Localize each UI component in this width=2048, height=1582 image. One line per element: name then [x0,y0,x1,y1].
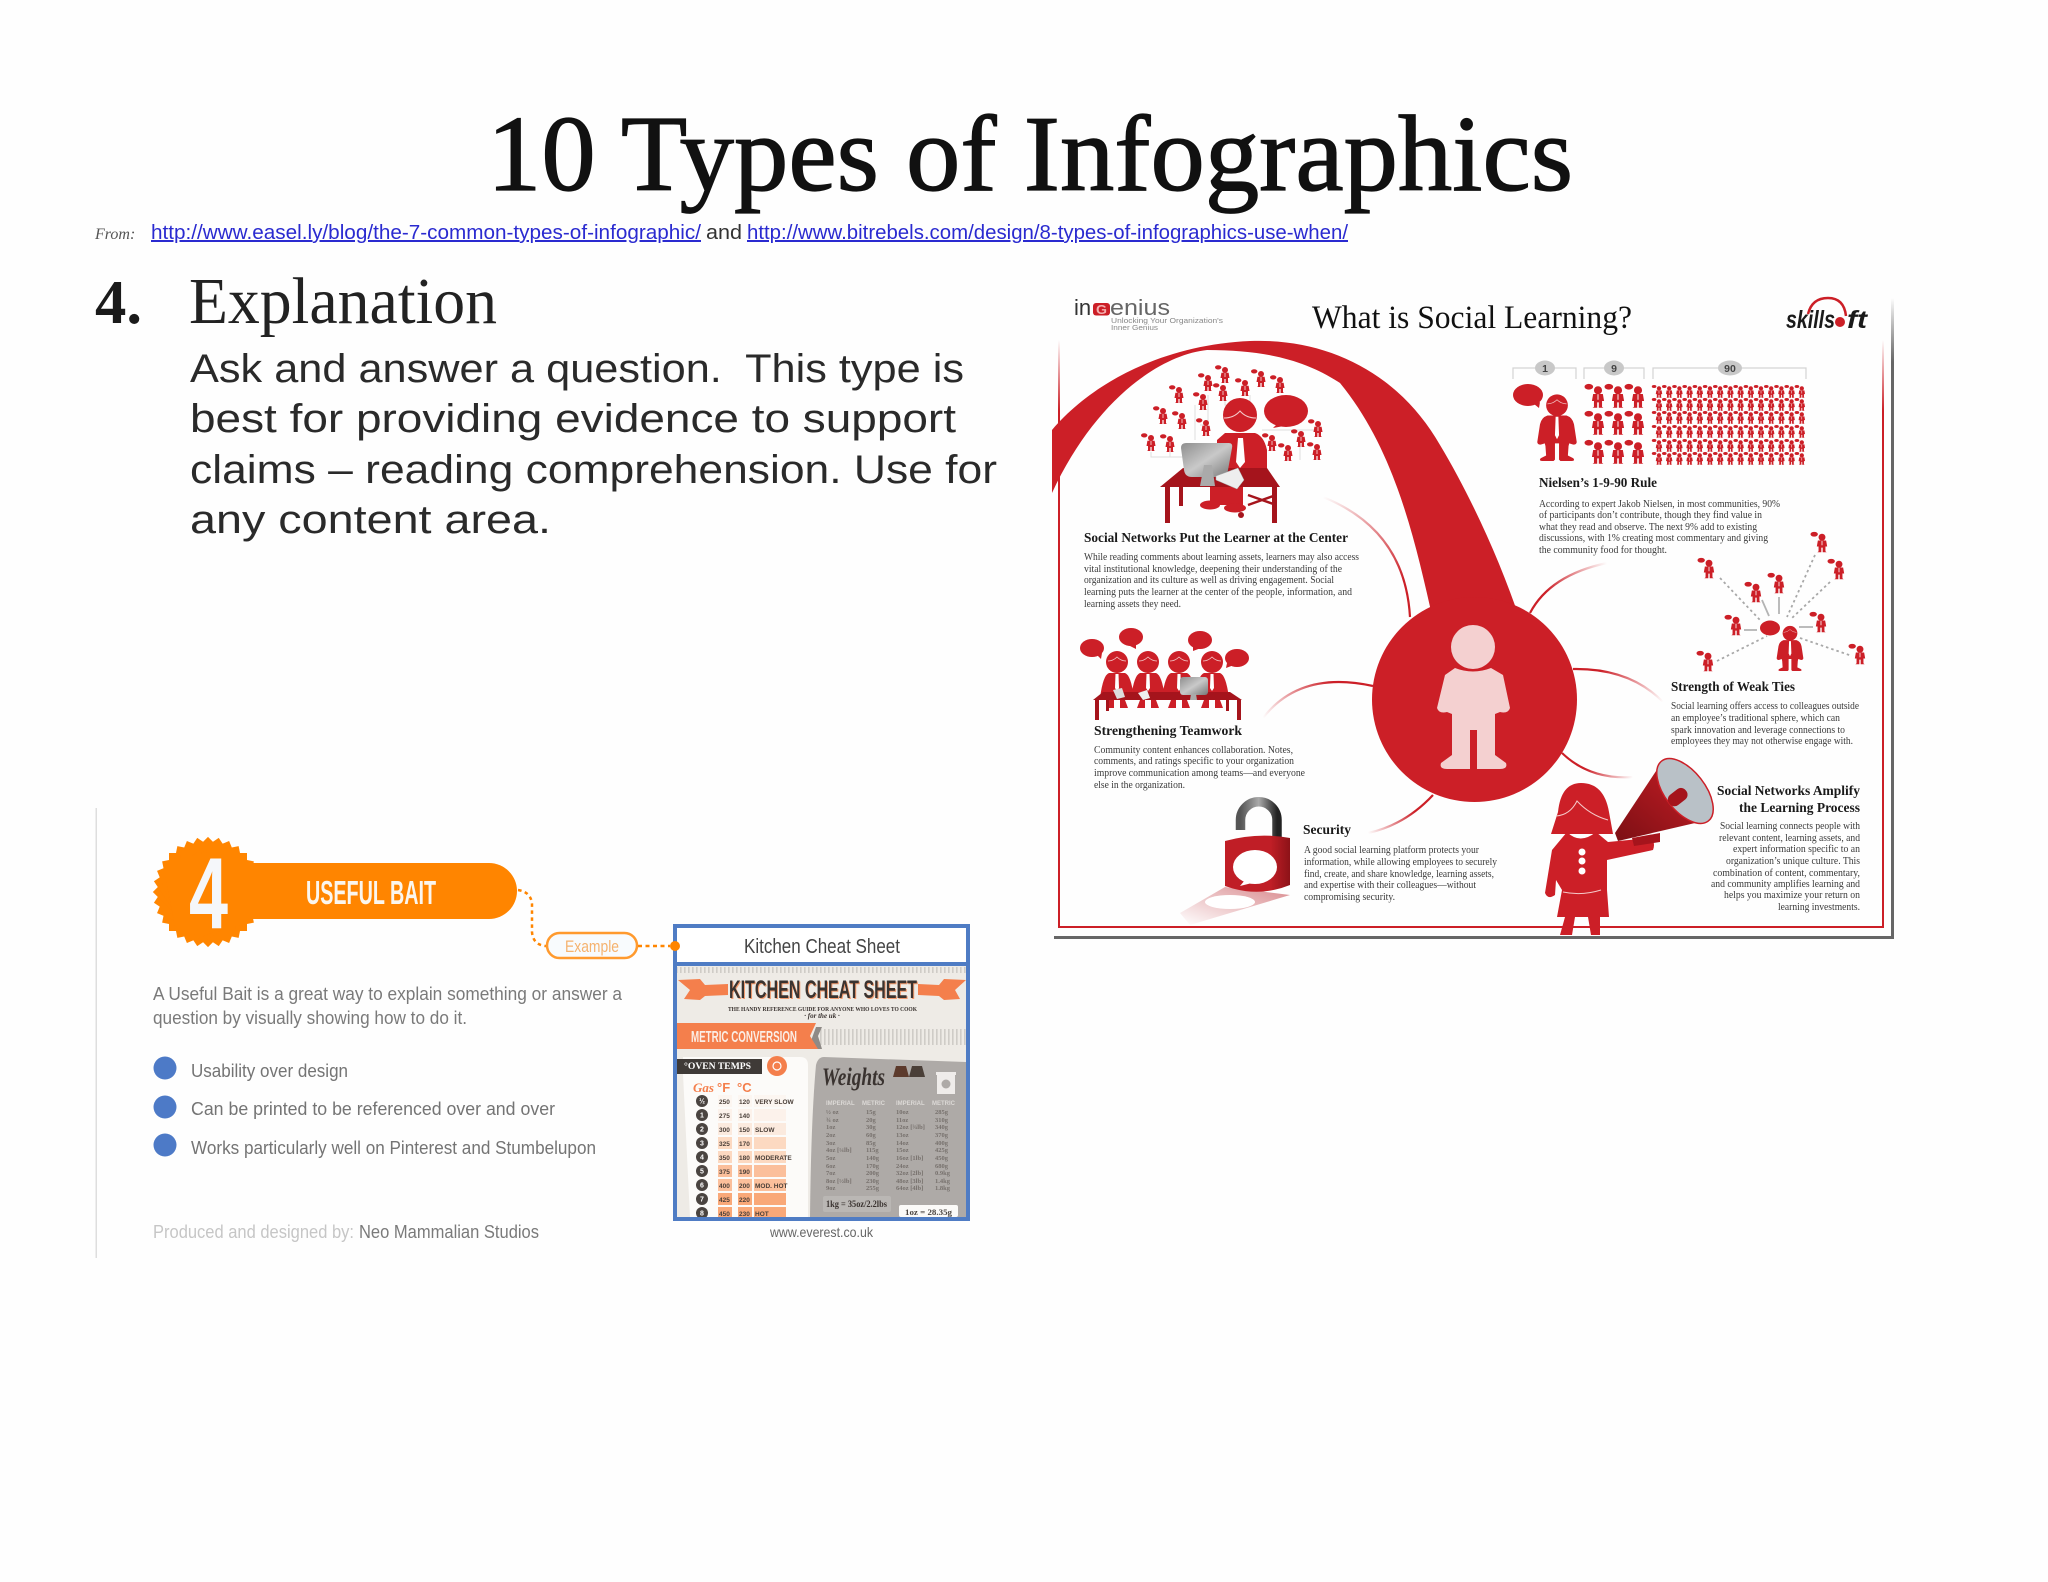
weights table: 7oz [826,1170,836,1177]
oven temps table: 375 [719,1169,730,1176]
oven temps table: 230 [739,1211,750,1218]
weights table: 140g [866,1155,880,1162]
weights table: 3oz [826,1140,836,1147]
oven temps table: ½ [699,1098,705,1106]
icon: woman with megaphone [1545,749,1724,935]
text: social networks center: learning puts the learner at the center of the people, information, and [1084,587,1353,598]
bullet list: Can be printed to be referenced over and over [191,1098,555,1119]
text: nielsen rule: According to expert Jakob Nielsen, in most communities, 90% [1539,499,1780,510]
text: strengthening teamwork: else in the organization. [1094,780,1185,791]
weights table: 16oz [1lb] [896,1155,923,1162]
weights table: 425g [935,1147,949,1154]
logo: ingenius: enius [1110,295,1170,320]
weights table: 1oz [826,1124,836,1131]
oven temps table: HOT [755,1211,769,1218]
connector end dot [670,941,680,951]
weights table: METRIC [932,1101,956,1107]
weights table: 12oz [¾lb] [896,1124,925,1131]
text: security: Security [1303,823,1351,838]
weights table: 85g [866,1140,876,1147]
weights table: 10oz [896,1109,909,1116]
logo: skillsoft: ft [1847,306,1869,334]
source links line: http://www.easel.ly/blog/the-7-common-types-of-infographic/ [151,222,701,244]
oven temps table: 425 [719,1197,730,1204]
frame [1054,298,1894,939]
text: nielsen rule: the community food for thought. [1539,545,1667,556]
source links line [94,222,1348,244]
oven temps table: 4 [700,1154,704,1162]
text: security: compromising security. [1304,892,1395,903]
text: strengthening teamwork: comments, and ratings specific to your organization [1094,756,1295,767]
logo: ingenius: G [1096,302,1107,317]
text: strengthening teamwork: improve communication among teams—and everyone [1094,768,1305,779]
text: social networks center [1084,531,1359,610]
icon: teamwork table [1080,628,1249,720]
badge: number 4 [153,837,517,950]
connector and example pill: Example [565,937,619,956]
text: amplify: organization’s unique culture. This [1726,856,1860,867]
oven temps table: 325 [719,1141,730,1148]
panel: kitchen cheat sheet example [675,926,968,1219]
weights table: ¾ oz [826,1117,839,1124]
oven temps table: SLOW [755,1127,775,1134]
oven temps table: 275 [719,1113,730,1120]
weights table: 5oz [826,1155,836,1162]
weights table: 1oz = 28.35g [905,1208,952,1217]
useful bait description: question by visually showing how to do it. [153,1007,467,1028]
infographic heading: What is Social Learning? [1312,300,1632,336]
logo: ingenius: Inner Genius [1111,323,1158,332]
weights table: 680g [935,1163,949,1170]
weights table: 2oz [826,1132,836,1139]
text: weak ties: spark innovation and leverage connections to [1671,725,1845,736]
weights table: 32oz [2lb] [896,1170,923,1177]
weights table: 450g [935,1155,949,1162]
weights table: 340g [935,1124,949,1131]
weights table: 15oz [896,1147,909,1154]
weights table: 370g [935,1132,949,1139]
oven temps table: 300 [719,1127,730,1134]
weights table: 170g [866,1163,880,1170]
weights table: 1.8kg [935,1185,951,1192]
bullet list [154,1056,596,1158]
badge: number 4: USEFUL BAIT [306,874,436,911]
text: social networks center: Social Networks Put the Learner at the Center [1084,531,1348,546]
kitchen title with ribbons [678,976,966,1020]
text: weak ties [1671,680,1859,747]
weights table: 24oz [896,1163,909,1170]
panel: kitchen cheat sheet example: Kitchen Cheat Sheet [744,936,900,958]
panel: what is social learning [1052,295,1894,939]
section description: Ask and answer a question. This type is [190,347,964,391]
oven temps table: 400 [719,1183,730,1190]
weights table: 60g [866,1132,876,1139]
oven temps table: 2 [700,1126,704,1134]
text: nielsen rule: of participants don’t contribute, though they find value in [1539,510,1763,521]
icon: padlock [1180,802,1290,925]
text: weak ties: employees they may not otherwise engage with. [1671,736,1853,747]
oven temps table [677,1056,808,1219]
weights table: 310g [935,1117,949,1124]
text: security: find, create, and share knowledge, learning assets, [1304,869,1494,880]
oven temps table: 7 [700,1196,704,1204]
text: nielsen rule [1539,476,1780,556]
weights table: 15g [866,1109,876,1116]
weights table: 400g [935,1140,949,1147]
oven temps table: 1 [700,1112,704,1120]
kitchen title with ribbons: THE HANDY REFERENCE GUIDE FOR ANYONE WHO LOVES TO COOK [728,1006,917,1013]
weights table: 285g [935,1109,949,1116]
text: security: A good social learning platform protects your [1304,845,1479,856]
oven temps table: 3 [700,1140,704,1148]
section description: any content area. [190,498,551,542]
oven temps table: 120 [739,1099,750,1106]
kitchen title with ribbons: · for the uk · [804,1012,840,1020]
oven temps table: 150 [739,1127,750,1134]
weights table: 115g [866,1147,879,1154]
central learner figure [1372,597,1577,802]
icon: learner at desk with network [1141,365,1322,523]
oven temps table: 6 [700,1182,704,1190]
kitchen title with ribbons: KITCHEN CHEAT SHEET [730,977,918,1005]
section heading: Explanation [189,265,497,338]
weights table: 1.4kg [935,1178,951,1185]
oven temps table: °C [737,1080,752,1095]
text: weak ties: an employee’s traditional sphere, which can [1671,713,1841,724]
oven temps table: Gas [693,1080,714,1095]
weights table: 48oz [3lb] [896,1178,923,1185]
credit line: Neo Mammalian Studios [359,1221,539,1242]
chart: nielsen 1-9-90 people: 90 [1724,363,1736,375]
credit line: Produced and designed by: [153,1221,354,1242]
oven temps table: 190 [739,1169,750,1176]
weights table: 64oz [4lb] [896,1185,923,1192]
section description: claims – reading comprehension. Use for [190,448,997,492]
weights table: 230g [866,1178,880,1185]
text: amplify: Social Networks Amplify [1717,784,1860,799]
text: amplify: helps you maximize your return on [1724,890,1861,901]
source links line: From: [94,226,135,243]
oven temps table: 200 [739,1183,750,1190]
metric conversion banner: METRIC CONVERSION [691,1029,797,1046]
badge: number 4: 4 [189,838,228,950]
diagram: strength of weak ties [1696,532,1865,671]
chart: nielsen 1-9-90 people: 9 [1611,363,1617,375]
oven temps table: 220 [739,1197,750,1204]
bullet list: Works particularly well on Pinterest and Stumbelupon [191,1137,596,1158]
weights table: 6oz [826,1163,836,1170]
weights table: IMPERIAL [896,1101,925,1107]
text: security: information, while allowing employees to securely [1304,857,1498,868]
oven temps table: 450 [719,1211,730,1218]
text: amplify: expert information specific to an [1733,844,1861,855]
text: amplify: learning investments. [1778,902,1860,913]
text: weak ties: Strength of Weak Ties [1671,680,1796,695]
panel: useful bait [96,808,670,1258]
text: nielsen rule: Nielsen’s 1-9-90 Rule [1539,476,1657,491]
oven temps table: °OVEN TEMPS [684,1061,751,1071]
oven temps table: 5 [700,1168,704,1176]
text: nielsen rule: discussions, with 1% creating most commentary and giving [1539,533,1769,544]
text: amplify: and community amplifies learning and [1711,879,1861,890]
weights table [810,1057,966,1217]
section description [190,347,997,542]
red swoosh [1052,341,1520,620]
weights table: ½ oz [826,1109,839,1116]
title: 10 Types of Infographics [487,95,1573,214]
oven temps table: MOD. HOT [755,1183,788,1190]
text: strengthening teamwork: Strengthening Teamwork [1094,724,1242,739]
text: amplify: Social learning connects people with [1720,821,1861,832]
kitchen title with ribbons: KITCHEN CHEAT SHEET [729,976,917,1004]
oven temps table: 180 [739,1155,750,1162]
weights table: 200g [866,1170,880,1177]
logo: ingenius [1074,295,1223,332]
source links line: and [706,222,742,244]
connector and example pill [518,890,670,958]
logo: ingenius: in [1074,295,1091,320]
weights table: 9oz [826,1185,836,1192]
text: amplify: relevant content, learning assets, and [1719,833,1861,844]
text: social networks center: organization and its culture as well as driving engagement. Social [1084,575,1334,586]
weights table: Weights [822,1064,885,1091]
oven temps table: 8 [700,1210,704,1218]
logo: skillsoft: skills [1786,306,1835,334]
weights table: 30g [866,1124,876,1131]
text: security: and expertise with their colleagues—without [1304,880,1476,891]
text: social networks center: While reading comments about learning assets, learners may also access [1084,552,1359,563]
weights table: IMPERIAL [826,1101,855,1107]
weights table: 20g [866,1117,876,1124]
text: nielsen rule: what they read and observe. The next 9% add to existing [1539,522,1758,533]
text: social networks center: learning assets they need. [1084,599,1181,610]
text: security [1303,823,1498,903]
useful bait description: A Useful Bait is a great way to explain something or answer a [153,983,623,1004]
useful bait description [153,983,623,1028]
chart: nielsen 1-9-90 people [1513,360,1806,465]
example source url: www.everest.co.uk [769,1224,874,1240]
weights table: 11oz [896,1117,908,1124]
weights table: 255g [866,1185,880,1192]
source links line: http://www.bitrebels.com/design/8-types-of-infographics-use-when/ [747,222,1348,244]
text: weak ties: Social learning offers access to colleagues outside [1671,701,1859,712]
logo: ingenius: Unlocking Your Organization's [1111,316,1223,325]
text: amplify [1711,784,1861,913]
text: strengthening teamwork [1094,724,1305,791]
oven temps table: 250 [719,1099,730,1106]
weights table: METRIC [862,1101,886,1107]
oven temps table: MODERATE [755,1155,792,1162]
weights table: 1kg = 35oz/2.2lbs [826,1199,887,1209]
weights table: 14oz [896,1140,909,1147]
oven temps table: 140 [739,1113,750,1120]
logo: skillsoft [1786,298,1869,334]
oven temps table: VERY SLOW [755,1099,795,1106]
credit line [153,1221,539,1242]
text: amplify: combination of content, commentary, [1713,868,1860,879]
oven temps table: 350 [719,1155,730,1162]
weights table: 4oz [¼lb] [826,1147,852,1154]
text: strengthening teamwork: Community content enhances collaboration. Notes, [1094,745,1293,756]
oven temps table: °F [717,1080,730,1095]
weights table: 8oz [½lb] [826,1178,852,1185]
oven temps table: 170 [739,1141,750,1148]
section heading: 4. [95,269,142,337]
text: social networks center: vital institutional knowledge, deepening their understanding of the [1084,564,1342,575]
bullet list: Usability over design [191,1060,348,1081]
metric conversion banner [677,1023,966,1049]
weights table: 0.9kg [935,1170,951,1177]
chart: nielsen 1-9-90 people: 1 [1542,363,1548,375]
connector arcs [1263,497,1663,833]
section description: best for providing evidence to support [190,397,956,441]
weights table: 13oz [896,1132,909,1139]
text: amplify: the Learning Process [1739,801,1861,816]
